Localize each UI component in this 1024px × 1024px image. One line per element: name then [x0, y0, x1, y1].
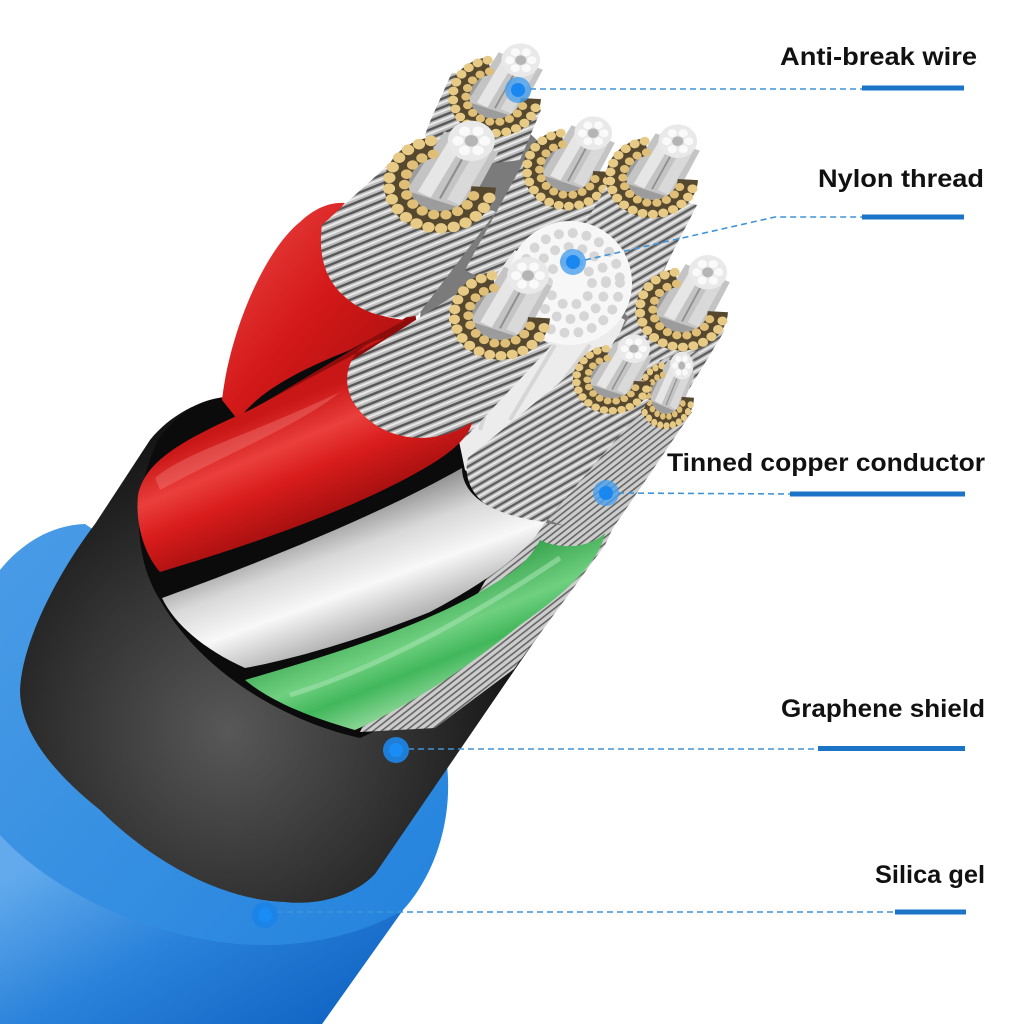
strand bundle: lower right: [548, 352, 695, 540]
strand bundle: upper middle: [465, 116, 615, 300]
black graphene shield: [20, 397, 518, 903]
lower tinned conductor strands: [360, 350, 700, 732]
strand bundle: anti-break wire: [425, 43, 543, 170]
callout: graphene shield: [383, 695, 985, 763]
outer blue silica gel sheath: [0, 524, 448, 1024]
strand bundle: upper left: [321, 121, 498, 318]
callout: nylon thread: [560, 165, 984, 275]
white insulated wire: [162, 468, 545, 668]
strand bundle: centre left: [345, 257, 552, 449]
callout: tinned copper conductor: [593, 449, 985, 506]
strand bundle: upper right: [570, 124, 700, 325]
strand bundle: lower middle: [467, 334, 653, 522]
callout: silica gel: [252, 861, 985, 928]
strand bundle: right: [590, 255, 730, 470]
white nylon thread core: [440, 221, 632, 525]
callout: graphene shield: Graphene shield: [781, 695, 985, 723]
front red insulated wire: [137, 338, 472, 572]
callout: anti-break wire: [505, 43, 977, 103]
callout: tinned copper conductor: Tinned copper conductor: [667, 449, 985, 477]
illustration: cable cross-section: [0, 43, 730, 1024]
callout: nylon thread: Nylon thread: [818, 165, 984, 193]
rear red insulated wire: [222, 203, 405, 420]
callout: anti-break wire: Anti-break wire: [780, 43, 977, 71]
strand backing: [420, 100, 700, 540]
shield opening: [139, 320, 605, 738]
callout: silica gel: Silica gel: [875, 861, 985, 889]
green insulated wire: [245, 533, 605, 730]
dark red fill between the wires: [235, 312, 420, 440]
